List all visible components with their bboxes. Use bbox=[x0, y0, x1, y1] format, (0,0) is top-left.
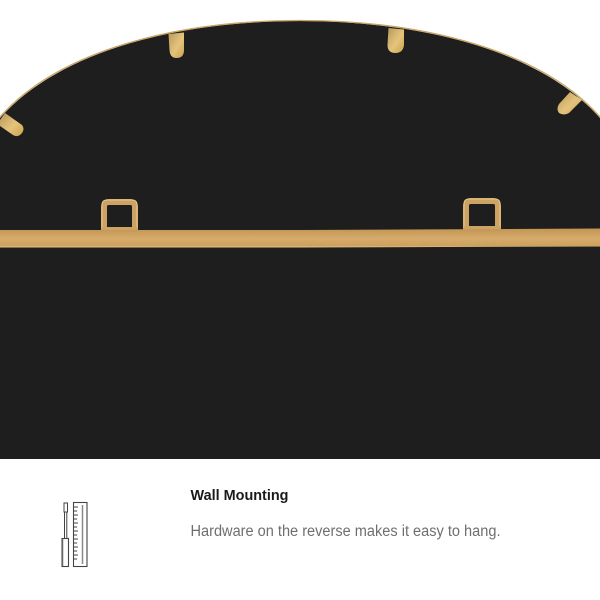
clip: top left bbox=[168, 32, 184, 58]
icon: mascara and ruler bbox=[62, 502, 87, 566]
description text: Hardware on the reverse makes it easy to hang. bbox=[190, 523, 500, 540]
clip: top right bbox=[388, 28, 404, 53]
hanging bar bbox=[0, 228, 600, 248]
heading: Wall Mounting: Wall Mounting bbox=[190, 488, 288, 504]
hanging bracket: left loop bbox=[100, 200, 142, 232]
clip: far left bbox=[0, 113, 24, 136]
frame edge bbox=[0, 20, 600, 117]
panel: mirror back bbox=[0, 20, 600, 459]
hanging bracket: right loop bbox=[462, 199, 504, 231]
clip: far right bbox=[558, 92, 582, 114]
